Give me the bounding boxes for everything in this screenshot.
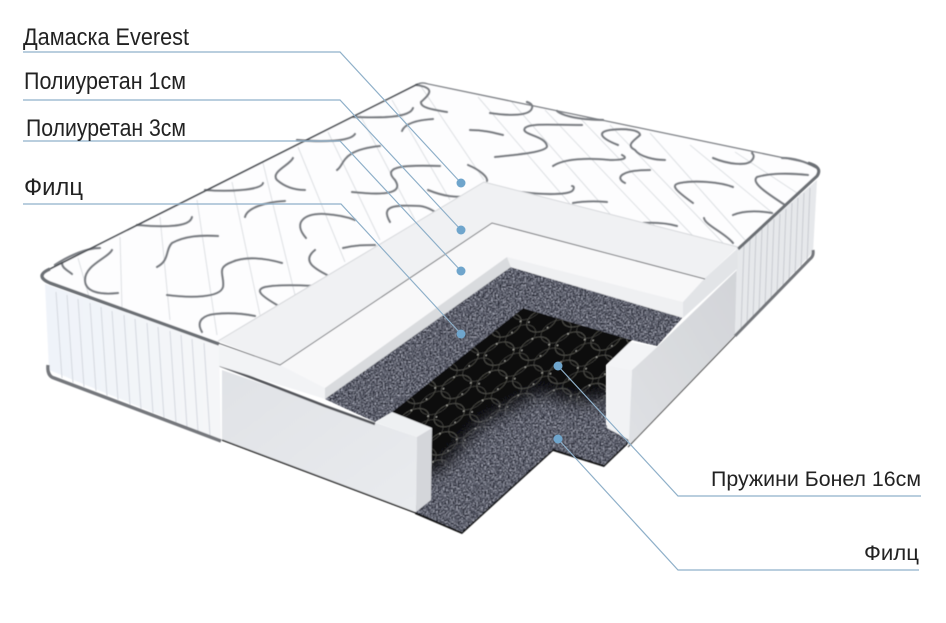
callout: Пружини Бонел 16см: Пружини Бонел 16см — [711, 468, 921, 491]
callout: Филц top — [23, 174, 466, 338]
foam layer polyurethane 1cm — [218, 182, 738, 365]
foam layer polyurethane 3cm — [219, 223, 738, 399]
felt layer under foam — [324, 266, 683, 423]
wave pattern — [55, 85, 817, 332]
top cover piping — [42, 83, 819, 344]
right quilted side panel — [735, 180, 817, 336]
quilting lines — [78, 85, 800, 335]
springs — [392, 308, 632, 486]
bottom felt layer — [400, 314, 632, 535]
quilted top cover — [42, 83, 819, 342]
callout: Полиуретан 1см — [23, 68, 466, 234]
mattress illustration — [42, 83, 819, 535]
callout: Филц bottom: Филц — [864, 542, 919, 565]
callout: Дамаска Everest — [23, 24, 466, 188]
callout: Филц bottom — [554, 434, 919, 570]
callout: Полиуретан 1см: Полиуретан 1см — [24, 68, 186, 95]
callout: Полиуретан 3см — [23, 115, 466, 276]
callout: Полиуретан 3см: Полиуретан 3см — [26, 115, 186, 142]
callout: Филц top: Филц — [24, 174, 83, 201]
callout: Пружини Бонел 16см — [554, 362, 921, 496]
left side wall — [219, 365, 462, 533]
left quilted side panel — [45, 284, 221, 441]
right side wall — [607, 270, 737, 447]
callout: Дамаска Everest: Дамаска Everest — [23, 24, 189, 51]
